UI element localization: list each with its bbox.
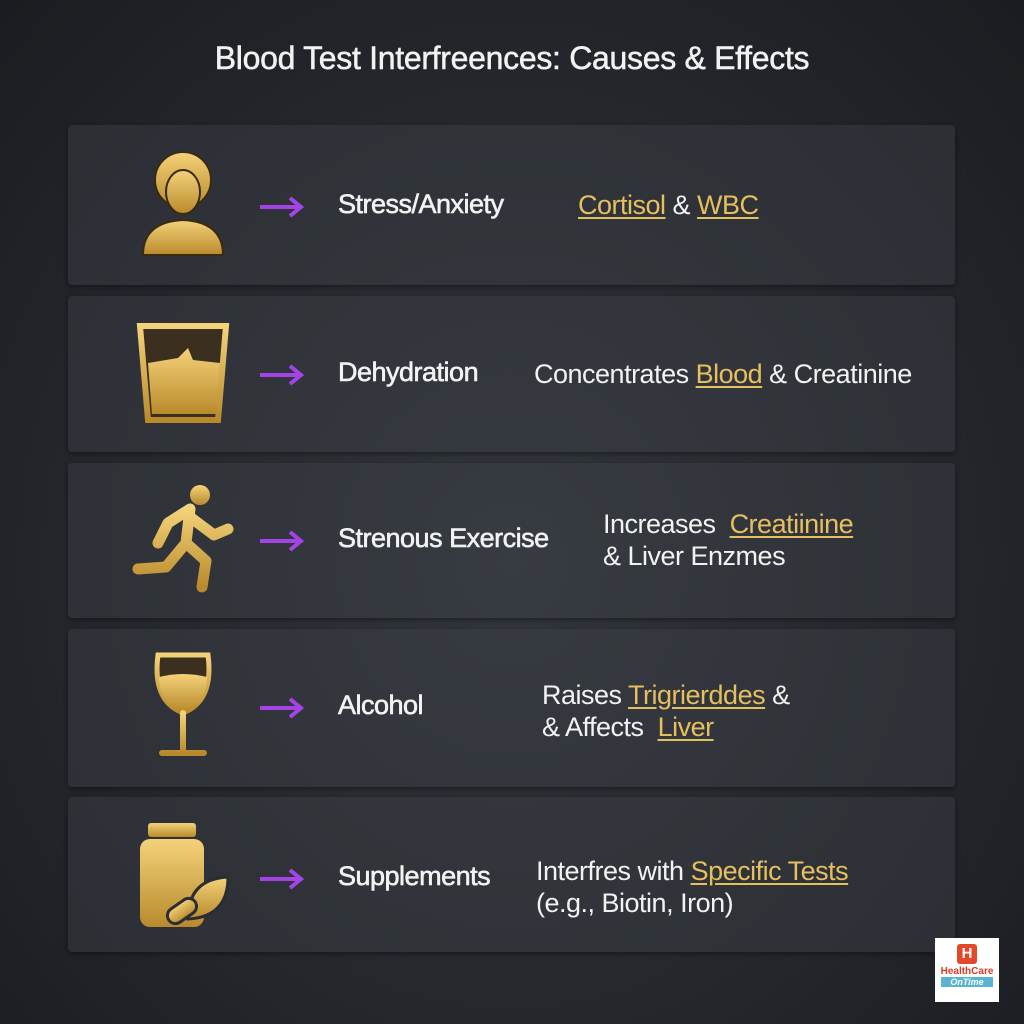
- icon: person: [142, 151, 224, 256]
- panel: supplements: [68, 797, 955, 952]
- effect: [536, 856, 848, 918]
- cause: Alcohol: [338, 690, 423, 720]
- logo: H: [962, 945, 972, 962]
- arrow: [260, 196, 304, 218]
- logo: [935, 938, 999, 1002]
- effect: [603, 509, 854, 571]
- cause: Strenous Exercise: [338, 523, 549, 553]
- logo: HealthCare: [941, 966, 993, 977]
- icon: wine glass: [154, 652, 212, 756]
- icon: cracked glass: [136, 323, 230, 423]
- cause: Supplements: [338, 861, 490, 891]
- icon: bottle with leaf: [140, 823, 226, 927]
- panel: stress: [68, 125, 955, 285]
- panel: exercise: [68, 463, 955, 618]
- cause: Stress/Anxiety: [338, 189, 504, 219]
- effect: Cortisol & WBC: [578, 190, 759, 220]
- arrow: [260, 530, 304, 552]
- title: Blood Test Interfreences: Causes & Effects: [215, 40, 809, 76]
- arrow: [260, 364, 304, 386]
- panel: alcohol: [68, 629, 955, 787]
- effect: Raises Trigrierddes &: [542, 680, 790, 710]
- effect: & Liver Enzmes: [603, 541, 785, 571]
- arrow: [260, 868, 304, 890]
- effect: & Affects Liver: [542, 712, 714, 742]
- effect: (e.g., Biotin, Iron): [536, 888, 733, 918]
- logo: OnTime: [950, 977, 984, 987]
- effect: Concentrates Blood & Creatinine: [534, 359, 912, 389]
- icon: runner: [132, 485, 234, 592]
- panel: dehydration: [68, 296, 955, 452]
- effect: [542, 680, 790, 742]
- cause: Dehydration: [338, 357, 478, 387]
- effect: Increases Creatiinine: [603, 509, 853, 539]
- effect: Interfres with Specific Tests: [536, 856, 848, 886]
- arrow: [260, 698, 304, 718]
